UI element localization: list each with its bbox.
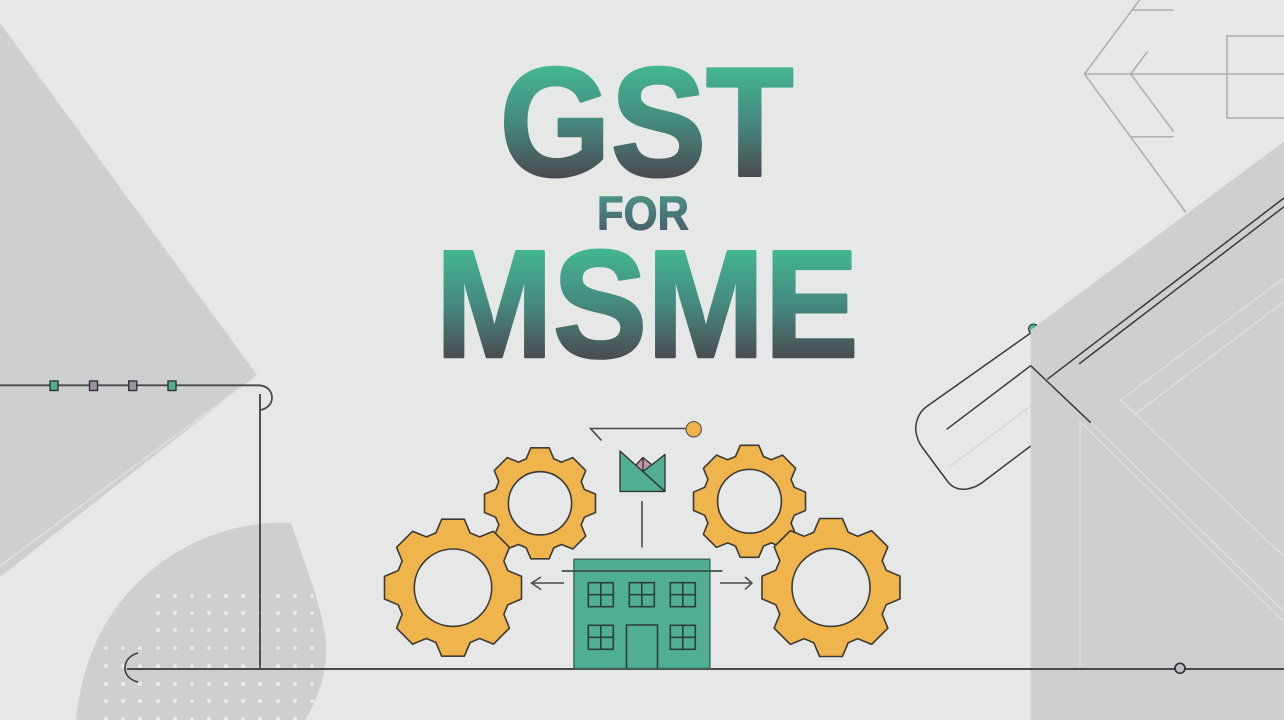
- title: MSME: MSME: [436, 219, 858, 390]
- arrow: right: [720, 577, 752, 590]
- grey blob with dot pattern: [76, 523, 326, 720]
- light inner lines: [1080, 278, 1284, 667]
- arrow: left: [532, 577, 564, 590]
- top right wireframe arrow lines: [1084, 0, 1284, 212]
- gear: lower right: [762, 518, 900, 656]
- marker squares: [50, 381, 176, 390]
- icon: envelope / crown: [620, 451, 665, 492]
- gear: upper left: [484, 448, 596, 559]
- windows: [588, 583, 695, 649]
- dark diagonal lines: [1031, 198, 1284, 423]
- green dot behind right shape: [1028, 324, 1038, 334]
- door: [626, 625, 658, 668]
- vertical connector: [259, 394, 261, 669]
- title: GST: GST: [500, 36, 794, 208]
- roof line: [562, 570, 722, 572]
- ground line with end cap and node: [125, 653, 1284, 682]
- icon: green building: [562, 559, 722, 668]
- connector line with square markers: [0, 381, 272, 410]
- node: [1175, 663, 1185, 673]
- top pointer line with yellow dot: [590, 422, 701, 440]
- gear: lower left: [384, 519, 522, 656]
- vertical line from icon to building: [641, 501, 643, 548]
- left grey triangle: [0, 23, 257, 577]
- capsule outline behind right shape: [916, 333, 1031, 489]
- gear: upper right: [694, 445, 806, 557]
- right large grey shape: [1031, 142, 1284, 720]
- title: FOR: FOR: [597, 187, 689, 240]
- dot pattern: [104, 594, 314, 720]
